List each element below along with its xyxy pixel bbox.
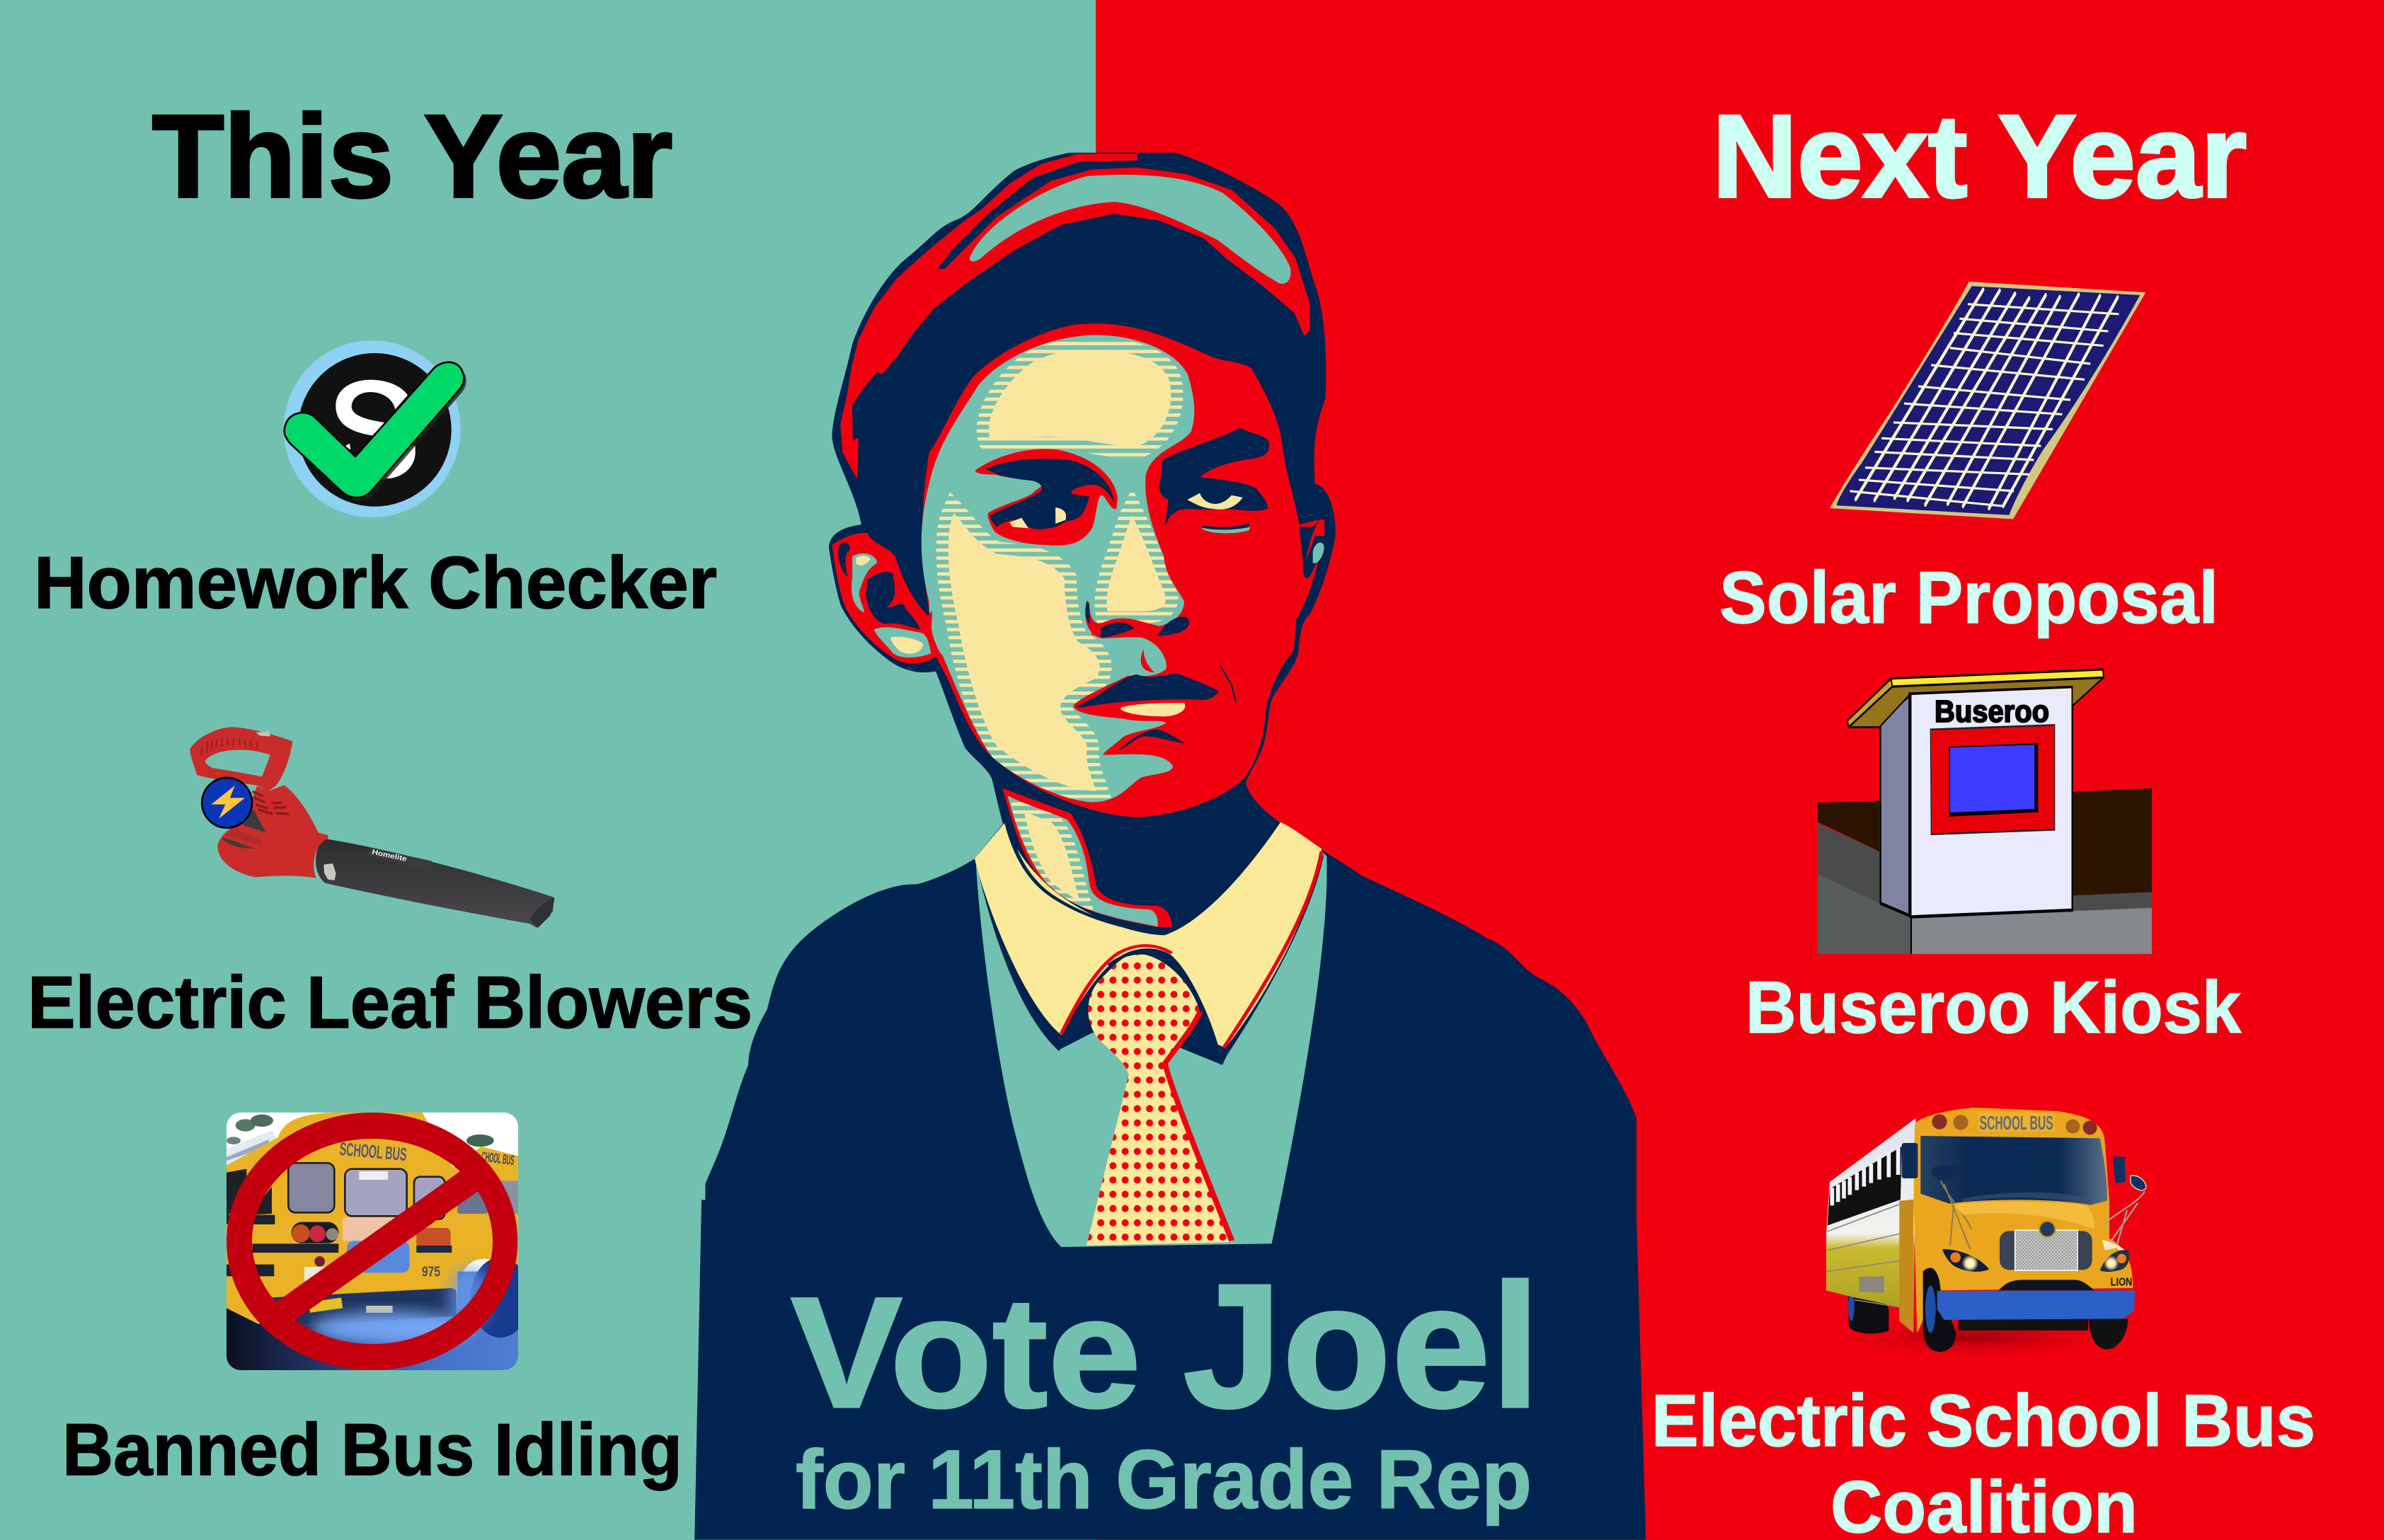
icon: banned bus idling — [227, 1113, 529, 1370]
bus photo: CHOOL BUS — [481, 1150, 515, 1168]
right ear — [1300, 520, 1324, 578]
blue screen — [1950, 745, 2034, 812]
front wheels — [1923, 1268, 1956, 1352]
slogan: Vote Joel: Vote — [791, 1265, 1141, 1441]
icon: electric school bus — [1812, 1108, 2146, 1361]
side pillar and door — [1902, 1143, 1918, 1178]
blue bumper — [1937, 1290, 2135, 1320]
face teal shadow — [922, 335, 1194, 803]
slogan: for 11th Grade Rep: for 11th Grade Rep — [796, 1433, 1532, 1527]
collar red lines — [1061, 851, 1322, 1048]
label: Electric School Bus Coalition — [1651, 1380, 2315, 1540]
label: Buseroo Kiosk: Buseroo Kiosk — [1746, 967, 2241, 1049]
cream collar — [975, 822, 1322, 1048]
label: Banned Bus Idling: Banned Bus Idling — [62, 1409, 682, 1491]
left eye and brow — [975, 449, 1118, 546]
label: Homework Checker: Homework Checker — [34, 542, 717, 624]
heading: This Year: This Year — [152, 91, 672, 222]
side trim — [1826, 1205, 1899, 1307]
nozzle — [316, 839, 555, 928]
blower head: Homelite — [371, 849, 408, 863]
icon: homework checker with green check — [284, 340, 466, 517]
roof — [1849, 677, 2104, 728]
grille — [2000, 1231, 2092, 1270]
kiosk side — [1881, 696, 1909, 916]
curb — [1818, 823, 1879, 903]
portrait: shirt, collar and tie — [975, 788, 1327, 1247]
headlights — [1942, 1249, 1989, 1272]
warning lights — [1932, 1114, 1947, 1130]
background wall — [1818, 801, 1879, 851]
icon: electric school bus: SCHOOL BUS — [1980, 1112, 2053, 1134]
panel frame — [1830, 282, 2145, 519]
right eye and brow — [1159, 427, 1269, 534]
lower intake — [1998, 1280, 2094, 1290]
bus photo: SCHOOL BUS — [339, 1138, 408, 1165]
bus photo: 975 — [422, 1263, 440, 1280]
pavement — [1818, 874, 1911, 954]
bus photo — [227, 1113, 529, 1370]
background: red right side — [1096, 0, 2384, 1540]
nose — [1085, 600, 1189, 672]
face cream highlights with halftone stripes — [949, 350, 1171, 791]
bus side — [1826, 1118, 1916, 1328]
heading: Next Year: Next Year — [1712, 91, 2247, 222]
head navy silhouette — [829, 153, 1336, 835]
label: Electric Leaf Blowers: Electric Leaf Blowers — [28, 962, 752, 1044]
red display frame — [1930, 725, 2055, 834]
hair teal highlight — [970, 175, 1290, 284]
label: Electric School Bus Coalition: Electric School Bus — [1651, 1380, 2315, 1462]
background: teal left side — [0, 0, 1096, 1540]
destination sign — [1978, 1113, 2055, 1132]
kiosk sign text: Buseroo — [1935, 694, 2049, 729]
blower head — [190, 727, 432, 880]
collar navy shadow — [976, 854, 1324, 1065]
front of bus — [1913, 1108, 2133, 1333]
portrait: head — [829, 153, 1336, 835]
icon: electric leaf blower — [190, 727, 555, 928]
charge badge — [202, 778, 252, 828]
LION badge: LION — [2111, 1277, 2132, 1289]
windshield — [1920, 1136, 2107, 1205]
panel cells — [1837, 286, 2140, 515]
icon: Buseroo kiosk — [1818, 670, 2152, 954]
kiosk front — [1910, 686, 2073, 917]
tie with polka dots — [1087, 953, 1232, 1246]
bus shadow — [1812, 1314, 2143, 1361]
hair red highlight — [841, 154, 1310, 477]
neck shadow — [1002, 788, 1171, 934]
slogan: Vote Joel — [791, 1247, 1540, 1444]
portrait: body with navy jacket — [694, 778, 1646, 1540]
undercarriage — [1959, 1318, 2088, 1331]
label: Solar Proposal: Solar Proposal — [1719, 557, 2218, 639]
hood highlight — [1954, 1202, 2094, 1229]
rear wheels — [1847, 1271, 1889, 1333]
side window band — [1828, 1147, 1902, 1226]
mirrors — [1931, 1166, 1959, 1181]
teal shirt — [976, 851, 1327, 1247]
mouth — [1077, 665, 1236, 750]
left ear — [832, 533, 943, 664]
panel grid lines — [1850, 304, 2119, 506]
face red base — [922, 323, 1324, 817]
prohibition sign — [227, 1113, 517, 1370]
icon: solar panel — [1830, 282, 2145, 519]
slogan: Vote Joel: Joel — [1183, 1247, 1540, 1444]
